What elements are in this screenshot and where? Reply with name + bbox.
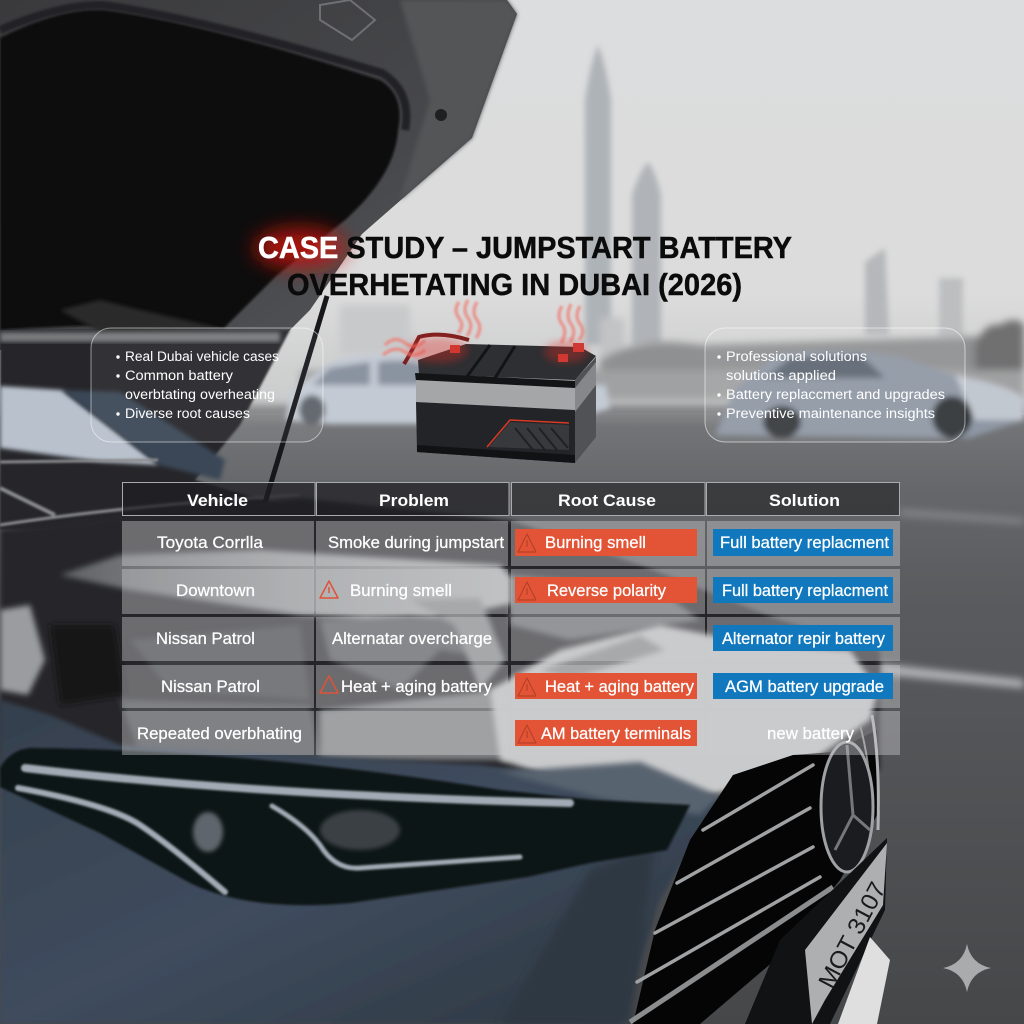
- panel: overview: Diverse root causes: [125, 406, 250, 421]
- row 4 text: Heat + aging battery: [341, 678, 493, 696]
- title: OVERHETATING IN DUBAI (2026): [287, 267, 742, 302]
- title: CASE STUDY – JUMPSTART BATTERY: [258, 230, 792, 265]
- row 4 text: [161, 678, 884, 696]
- car front: body, headlight and grille: [0, 700, 890, 1024]
- licence plate: [805, 843, 892, 1024]
- silver car hood: [490, 625, 878, 810]
- row 4 text: Heat + aging battery: [545, 678, 695, 696]
- row 5 text: Repeated overbhating: [137, 725, 302, 743]
- row 2 text: Reverse polarity: [547, 582, 667, 600]
- row 1 text: Full battery replacment: [720, 534, 889, 552]
- table row cells: [122, 521, 900, 755]
- row 1 text: [157, 534, 889, 552]
- title: [254, 228, 792, 302]
- row 3 text: [156, 630, 886, 648]
- panel: solutions: [705, 328, 965, 442]
- root cause chips: [515, 529, 697, 746]
- panel: solutions: Professional solutions: [726, 349, 867, 364]
- solution chips: [713, 529, 893, 699]
- row 1 text: Toyota Corrlla: [157, 534, 264, 552]
- panel: overview: Common battery: [125, 368, 233, 383]
- icon: overheating battery: [383, 300, 596, 463]
- row 5 text: AM battery terminals: [541, 725, 691, 743]
- background cars: [286, 351, 1024, 438]
- table header: Root Cause: [558, 491, 656, 510]
- table header: Problem: [379, 491, 449, 510]
- row 5 text: new battery: [767, 725, 855, 743]
- table: case studies: [122, 482, 900, 755]
- row 2 text: Burning smell: [350, 582, 452, 600]
- raised car hood: [0, 0, 517, 350]
- under-hood shadow and windshield: [0, 296, 327, 530]
- row 1 text: Smoke during jumpstart: [328, 534, 504, 552]
- row 4 text: Nissan Patrol: [161, 678, 260, 696]
- row 2 text: Full battery replacment: [722, 582, 888, 600]
- panel: overview: overbtating overheating: [125, 387, 275, 402]
- panel: solutions: Battery replaccmert and upgrades: [726, 387, 945, 402]
- table header: [122, 482, 900, 516]
- row 3 text: Nissan Patrol: [156, 630, 255, 648]
- icon: sparkle mark: [943, 944, 991, 992]
- warning icons: [320, 534, 536, 743]
- panel: overview: Real Dubai vehicle cases: [125, 349, 279, 364]
- panel: solutions: solutions applied: [726, 368, 836, 383]
- row 2 text: Downtown: [176, 582, 255, 600]
- licence plate: MOT 3107: [813, 878, 892, 993]
- row 3 text: Alternator repir battery: [722, 630, 886, 648]
- row 2 text: [176, 582, 888, 600]
- engine bay: [0, 498, 880, 770]
- row 5 text: [137, 725, 855, 743]
- table header: Vehicle: [187, 491, 248, 510]
- row 4 text: AGM battery upgrade: [725, 678, 884, 696]
- row 1 text: Burning smell: [545, 534, 646, 552]
- table header: Solution: [769, 491, 840, 510]
- row 3 text: Alternatar overcharge: [332, 630, 492, 648]
- panel: overview: [91, 328, 323, 442]
- panel: solutions: Preventive maintenance insights: [726, 406, 935, 421]
